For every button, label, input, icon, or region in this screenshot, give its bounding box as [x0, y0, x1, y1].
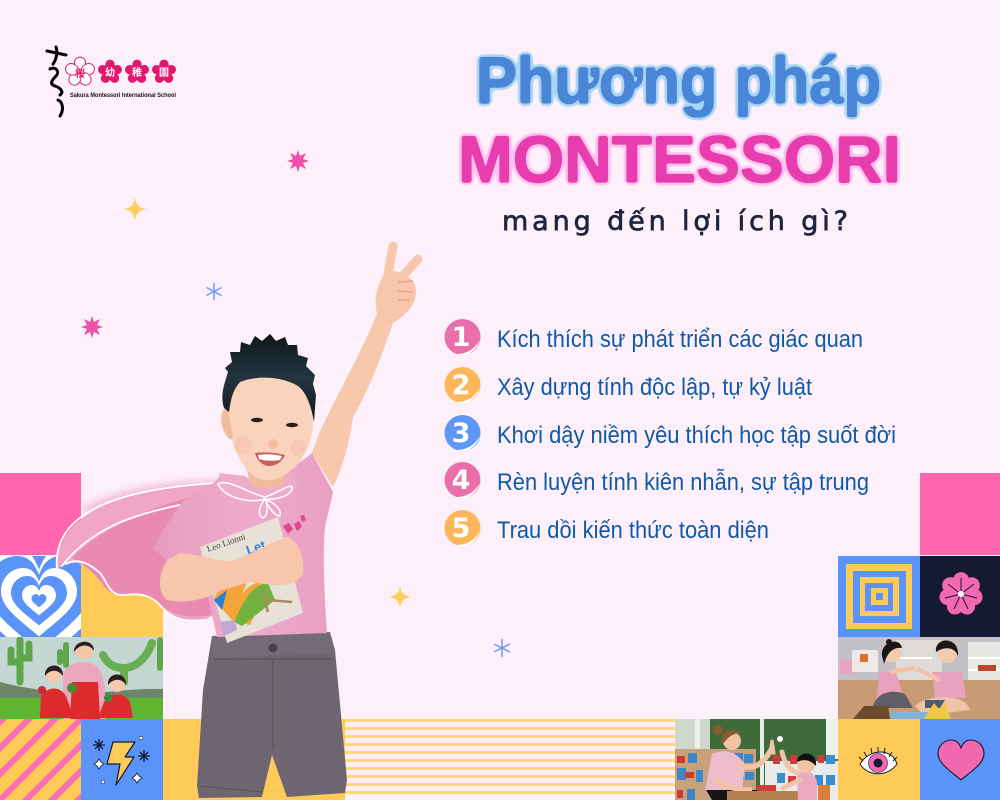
benefits list: [444, 319, 896, 546]
tile: diagonal stripes: [0, 719, 81, 800]
item 4: [444, 462, 869, 498]
logo name: Sakura Montessori International School: [70, 93, 176, 99]
star: pink left: [81, 316, 103, 338]
cape body: [57, 483, 225, 620]
item 2: Xây dựng tính độc lập, tự kỷ luật: [497, 374, 812, 401]
item 1: Kích thích sự phát triển các giác quan: [497, 326, 863, 353]
item 2: [444, 367, 812, 403]
child book: [200, 517, 303, 643]
tile: pink square: [0, 473, 81, 555]
child book: Let: [244, 537, 268, 558]
star: gold left: [123, 197, 147, 221]
tile: lightning: [81, 719, 163, 800]
item 5: Trau dồi kiến thức toàn diện: [497, 517, 769, 544]
asterisk: blue left: [206, 283, 222, 300]
photo: teacher and boy high five: [675, 719, 838, 800]
cape outline: [57, 483, 217, 621]
tile: eye: [838, 719, 920, 800]
subtitle: mang đến lợi ích gì?: [502, 206, 848, 237]
title line 1: Phương pháp: [476, 43, 881, 117]
child shirt logo: [283, 515, 306, 534]
child: [153, 246, 418, 798]
star: gold right: [389, 585, 411, 608]
item 4: 4: [452, 465, 470, 496]
title: [458, 43, 901, 237]
item 5: [444, 510, 769, 546]
logo pink flowers: [97, 60, 177, 85]
cape: [57, 480, 225, 621]
item 1: 1: [452, 322, 470, 353]
logo outlined flower: [64, 57, 96, 87]
child hair: [222, 334, 316, 422]
child shirt: [153, 453, 333, 637]
item 3: Khơi dậy niềm yêu thích học tập suốt đời: [497, 422, 896, 449]
logo: Sakura Montessori International School: [47, 47, 177, 116]
tile: yellow: [81, 556, 163, 637]
child shorts: [197, 632, 347, 798]
item 1: [444, 319, 863, 355]
cape fold: [72, 494, 212, 617]
photo: teacher and children with cacti: [0, 637, 163, 719]
item 3: [444, 415, 896, 451]
child raised arm: [312, 313, 393, 487]
child book: Leo Lionni: [205, 531, 247, 554]
photo: two children high five: [838, 637, 1000, 719]
right tile block: [838, 473, 1000, 800]
logo calligraphy: [47, 47, 66, 116]
logo characters: 桜: [75, 67, 85, 80]
title line 2: MONTESSORI: [458, 122, 901, 196]
logo characters: 稚: [132, 66, 142, 79]
logo characters: 園: [159, 67, 169, 79]
child collar: [219, 468, 298, 502]
item 4: Rèn luyện tính kiên nhẫn, sự tập trung: [497, 469, 869, 496]
asterisk: blue right: [494, 639, 510, 657]
left tile block: [0, 473, 345, 800]
decorative stars: [81, 150, 510, 657]
logo characters: [75, 66, 169, 80]
tile: concentric squares: [838, 556, 920, 637]
tile: hearts: [0, 556, 81, 637]
child neck and face: [221, 373, 313, 488]
tile: heart: [920, 719, 1000, 800]
tile: pink square: [920, 473, 1000, 555]
star: pink top: [287, 150, 309, 172]
tile: yellow wide: [163, 719, 345, 800]
item 5: 5: [452, 513, 470, 544]
item 3: 3: [452, 418, 470, 449]
stripes band: [345, 719, 675, 794]
tile: dark flower: [920, 556, 1000, 637]
child collar tie: [218, 483, 292, 518]
item 2: 2: [452, 370, 470, 401]
cape shadow: [80, 480, 224, 525]
logo characters: 幼: [105, 66, 115, 79]
child arm holding book: [160, 537, 303, 602]
child hand with peace sign: [376, 246, 418, 323]
